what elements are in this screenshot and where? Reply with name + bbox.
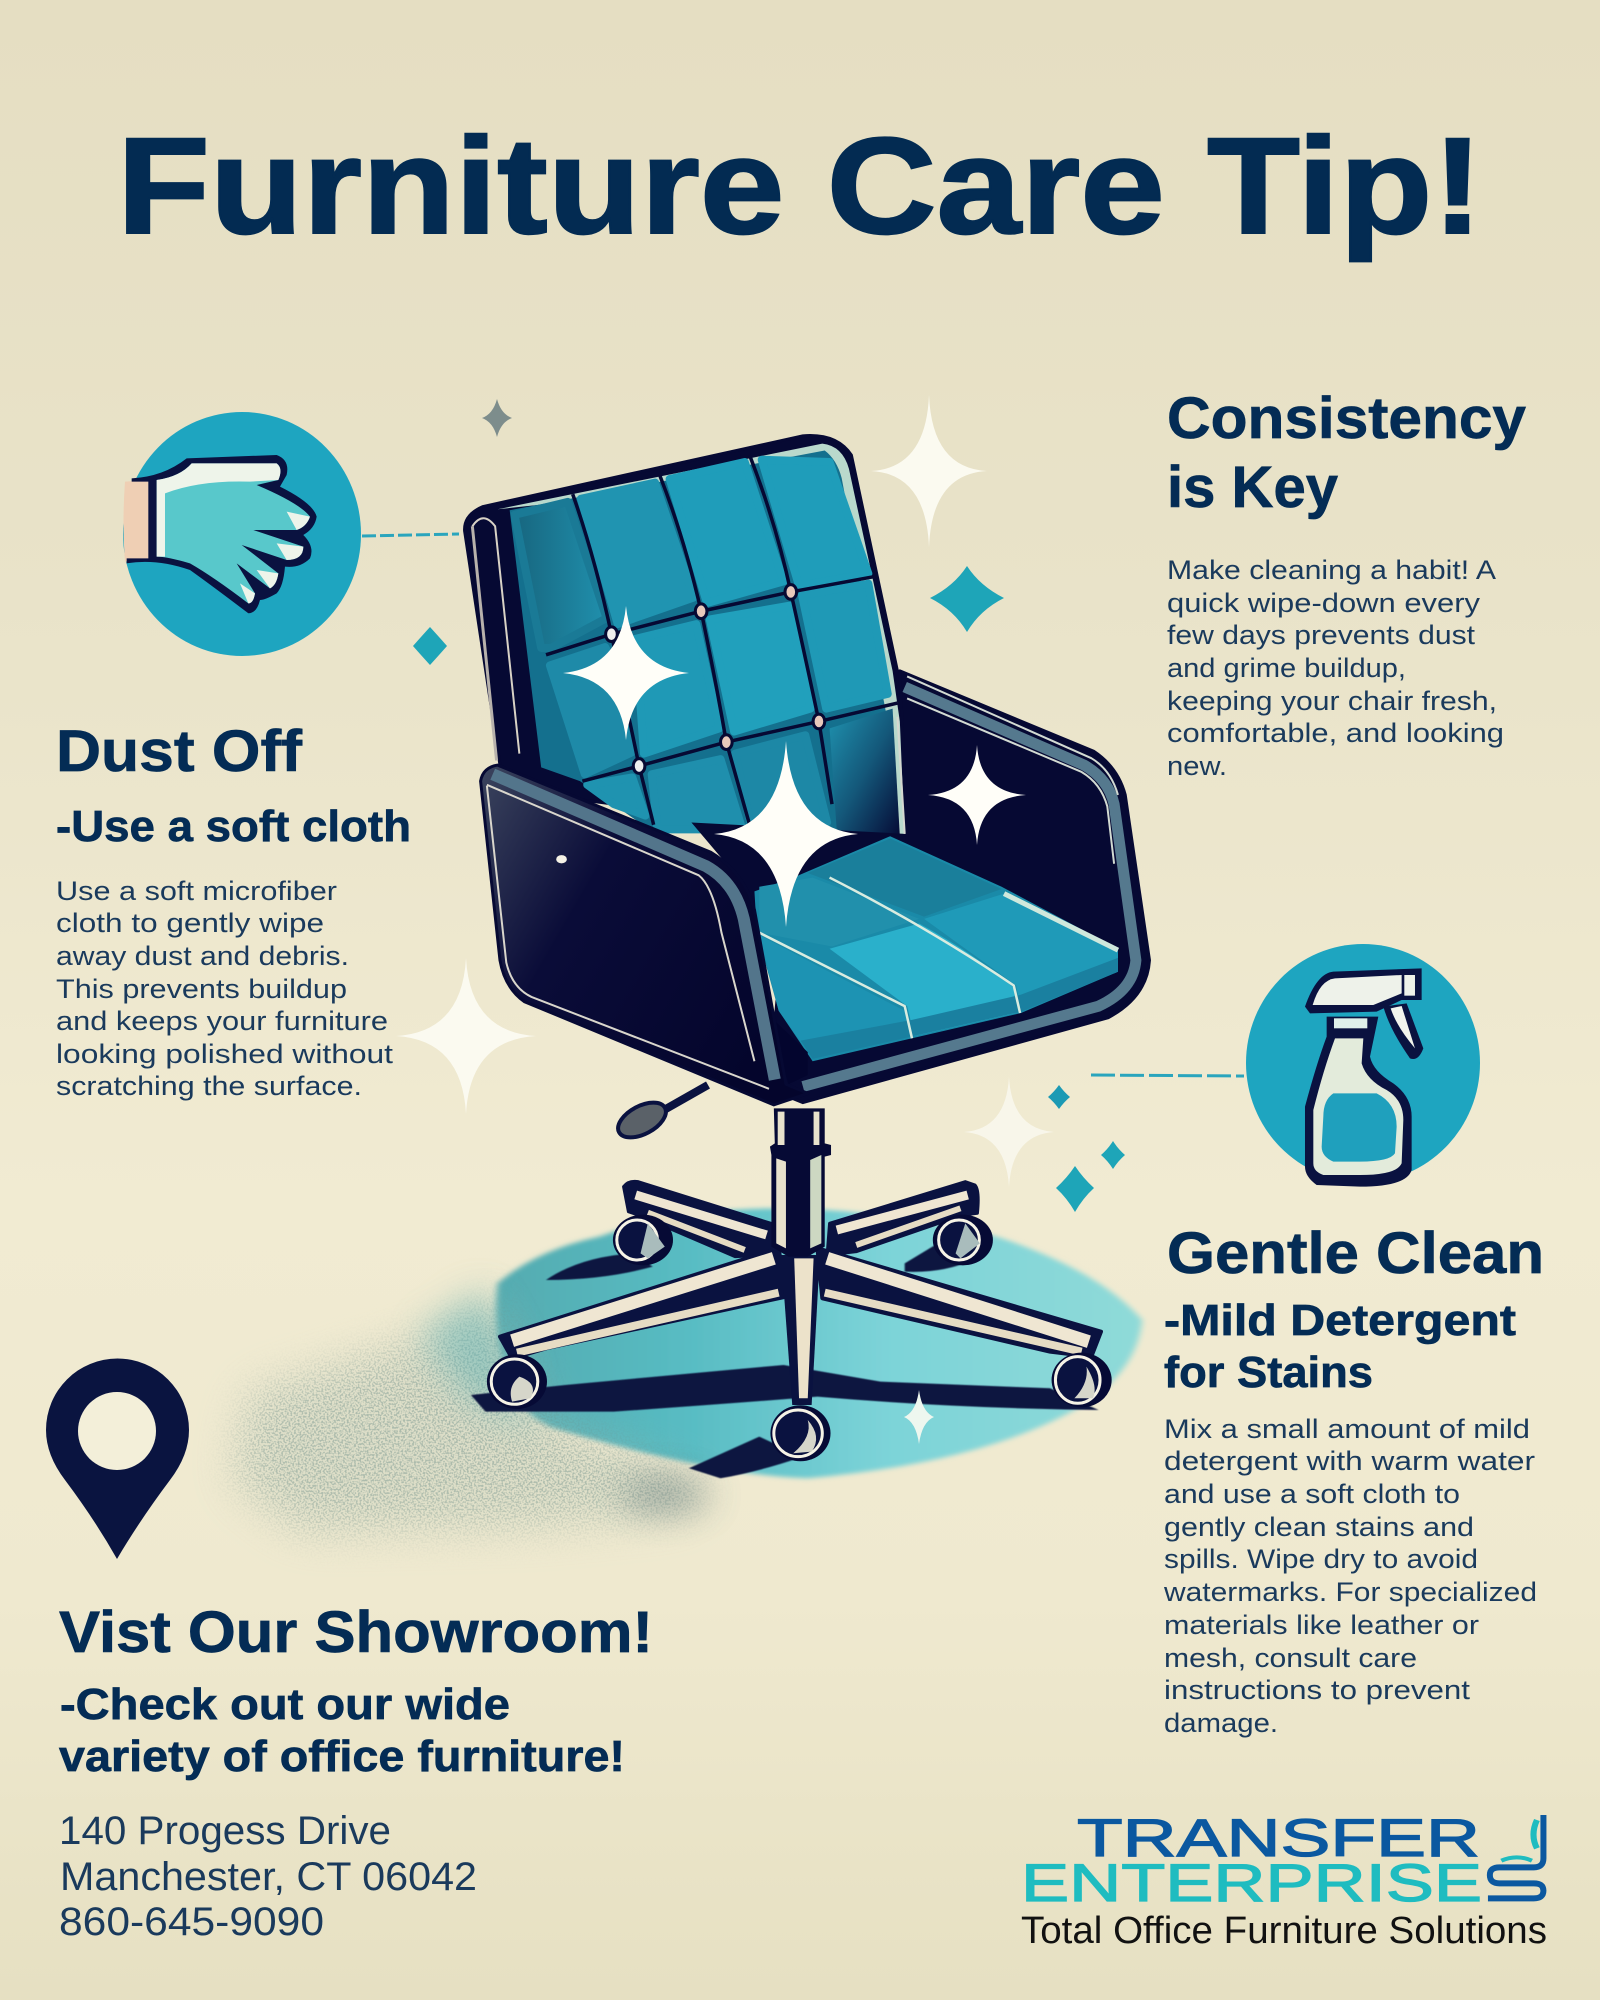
diamond: lower	[1056, 1166, 1094, 1212]
back right leg	[827, 1182, 978, 1255]
sparkle: on floor	[904, 1390, 934, 1444]
address: 860-645-9090	[59, 1900, 324, 1944]
tagline: Total Office Furniture Solutions	[1021, 1910, 1547, 1952]
heading: Consistency	[1167, 386, 1526, 451]
chair body	[465, 436, 1149, 1105]
icon: spray bottle	[1246, 944, 1480, 1187]
left arm rim	[493, 774, 775, 1080]
diamond: small upper	[1048, 1085, 1070, 1109]
front centre leg	[781, 1255, 820, 1405]
address	[59, 1809, 477, 1944]
body text: new.	[1167, 751, 1227, 781]
body text: This prevents buildup	[56, 974, 347, 1004]
logo: Transfer Enterprises	[1021, 1809, 1547, 1952]
bottle body outline	[1305, 1017, 1412, 1187]
sparkles	[396, 395, 1125, 1444]
body text: looking polished without	[56, 1039, 394, 1069]
body text: and use a soft cloth to	[1164, 1479, 1460, 1509]
caster front centre	[770, 1405, 831, 1461]
body text: comfortable, and looking	[1167, 718, 1504, 748]
tuft buttons	[606, 585, 825, 773]
diamond: large right	[930, 566, 1004, 632]
body text: materials like leather or	[1164, 1610, 1479, 1640]
backrest left piping	[472, 518, 519, 754]
teal floor ellipse	[496, 1208, 1142, 1478]
sparkle: left of chair	[396, 958, 536, 1114]
body text: few days prevents dust	[1167, 620, 1476, 650]
body text: watermarks. For specialized	[1163, 1577, 1537, 1607]
panel: consistency	[1167, 386, 1526, 781]
glove teal	[157, 463, 310, 603]
body text	[1167, 555, 1504, 781]
body text: spills. Wipe dry to avoid	[1164, 1544, 1478, 1574]
back side seam	[897, 717, 905, 834]
glove highlights	[157, 463, 310, 603]
body text: Make cleaning a habit! A	[1167, 555, 1496, 585]
body text: instructions to prevent	[1164, 1675, 1471, 1705]
subheading: -Mild Detergent	[1164, 1296, 1516, 1345]
sparkle: lower right	[964, 1077, 1054, 1187]
right arm rim	[803, 687, 1136, 1087]
body text	[56, 876, 394, 1101]
backrest frame	[465, 436, 907, 841]
neck	[1334, 1018, 1367, 1028]
panel: showroom	[59, 1600, 653, 1944]
diamond: small right	[1101, 1141, 1125, 1169]
wrist	[123, 480, 150, 562]
casters	[487, 1215, 1112, 1461]
backrest light rim	[498, 444, 905, 836]
body text: scratching the surface.	[56, 1071, 362, 1101]
connector: spray to chair	[1091, 1075, 1244, 1076]
floor shadows	[471, 1240, 1099, 1478]
subheading: variety of office furniture!	[59, 1732, 625, 1781]
chair base	[471, 1108, 1112, 1478]
gas column	[770, 1108, 831, 1257]
heading	[1167, 386, 1526, 520]
body text: away dust and debris.	[56, 941, 349, 971]
body text: cloth to gently wipe	[56, 908, 324, 938]
left arm piping	[487, 785, 769, 1089]
heading: Gentle Clean	[1167, 1221, 1544, 1286]
seat cushion	[754, 836, 1118, 1084]
wordmark: transfer: TRANSFER	[1077, 1809, 1480, 1868]
body text: keeping your chair fresh,	[1167, 686, 1497, 716]
floor stipple shadow	[235, 1290, 710, 1530]
body text: Use a soft microfiber	[56, 876, 337, 906]
chair-shaped S mark	[1488, 1815, 1543, 1898]
address: Manchester, CT 06042	[60, 1855, 477, 1899]
body text: and keeps your furniture	[56, 1006, 388, 1036]
heading: is Key	[1167, 455, 1338, 520]
body text: mesh, consult care	[1164, 1643, 1417, 1673]
caster front left	[487, 1354, 547, 1409]
sparkle: upper right	[871, 395, 987, 547]
caster back right	[933, 1215, 993, 1265]
body text: damage.	[1164, 1708, 1278, 1738]
subheading	[59, 1680, 625, 1781]
sparkle: grey	[482, 399, 512, 437]
subheading: -Check out our wide	[60, 1680, 510, 1729]
bottle liquid	[1322, 1093, 1397, 1162]
panel: gentle clean	[1163, 1221, 1544, 1738]
body text: detergent with warm water	[1164, 1446, 1535, 1476]
body text: and grime buildup,	[1167, 653, 1406, 683]
address: 140 Progess Drive	[59, 1809, 391, 1853]
body text: Mix a small amount of mild	[1164, 1414, 1530, 1444]
body text: gently clean stains and	[1164, 1512, 1474, 1542]
icon circle	[1246, 944, 1480, 1182]
body text	[1163, 1414, 1537, 1738]
sparkle: seat	[714, 741, 858, 927]
panel: dust off	[56, 719, 411, 1101]
body text: quick wipe-down every	[1167, 588, 1481, 618]
sparkle: backrest	[563, 606, 689, 740]
dark recess behind seat	[691, 822, 953, 951]
trigger	[1383, 1003, 1423, 1059]
icon: location pin	[46, 1358, 189, 1559]
right arm piping	[907, 676, 1118, 864]
heading: Dust Off	[56, 719, 303, 784]
back left leg	[624, 1181, 776, 1257]
icon circle	[123, 412, 361, 656]
diamond: left	[413, 627, 447, 665]
bottle glass	[1313, 1038, 1403, 1175]
backrest teal base	[510, 451, 900, 836]
sparkle: right arm	[928, 745, 1026, 845]
tuft seams	[546, 455, 897, 825]
caster front right	[1052, 1353, 1112, 1407]
left arm	[481, 765, 808, 1105]
subheading	[1164, 1296, 1516, 1397]
heading: Vist Our Showroom!	[59, 1600, 653, 1665]
icon: gloved hand	[123, 412, 361, 656]
connector: cloth to chair	[362, 534, 459, 536]
spray head	[1305, 968, 1422, 1013]
subheading: for Stains	[1164, 1348, 1373, 1397]
subheading: -Use a soft cloth	[56, 802, 411, 851]
title: Furniture Care Tip!	[117, 110, 1483, 263]
height lever	[612, 1085, 708, 1145]
right arm	[769, 671, 1149, 1103]
tufted cells	[515, 460, 900, 836]
glove outline	[127, 455, 317, 613]
wordmark: enterprises: ENTERPRISE	[1021, 1854, 1482, 1913]
front right leg	[817, 1248, 1101, 1357]
caster back left	[613, 1215, 673, 1265]
small highlight	[556, 855, 567, 863]
front left leg	[500, 1248, 786, 1358]
